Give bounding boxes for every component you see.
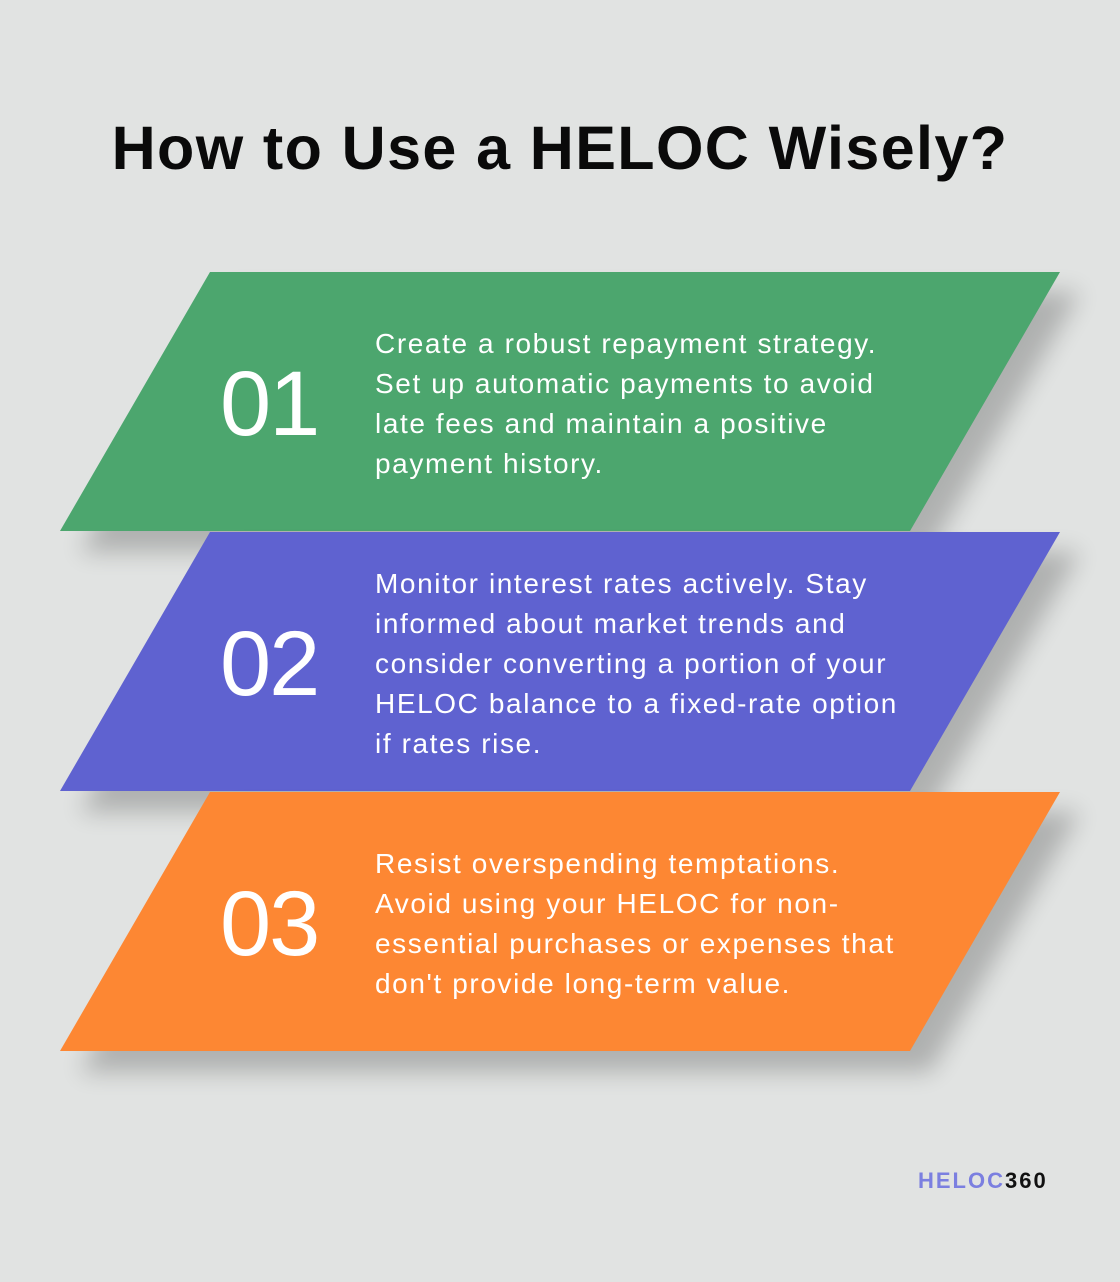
text 02: informed about market trends and [375,608,846,639]
text 01: Create a robust repayment strategy. [375,328,877,359]
panel: step 01 [60,272,1082,563]
text 02: Monitor interest rates actively. Stay [375,568,868,599]
text 02 [375,568,898,759]
panel: step 02 [60,532,1082,823]
text 01: late fees and maintain a positive [375,408,828,439]
text 02: HELOC balance to a fixed-rate option [375,688,898,719]
text 03: don't provide long-term value. [375,968,791,999]
text 02: consider converting a portion of your [375,648,887,679]
text 03: Resist overspending temptations. [375,848,840,879]
logo: HELOC360 [918,1168,1048,1193]
number 01: 01 [220,353,318,455]
text 03 [375,848,895,999]
text 01: payment history. [375,448,604,479]
number 02: 02 [220,613,318,715]
number 03: 03 [220,873,318,975]
text 01: Set up automatic payments to avoid [375,368,875,399]
text 03: Avoid using your HELOC for non- [375,888,840,919]
text 01 [375,328,877,479]
text 03: essential purchases or expenses that [375,928,895,959]
panel: step 03 [60,792,1082,1083]
text 02: if rates rise. [375,728,542,759]
title: How to Use a HELOC Wisely? [112,114,1008,182]
